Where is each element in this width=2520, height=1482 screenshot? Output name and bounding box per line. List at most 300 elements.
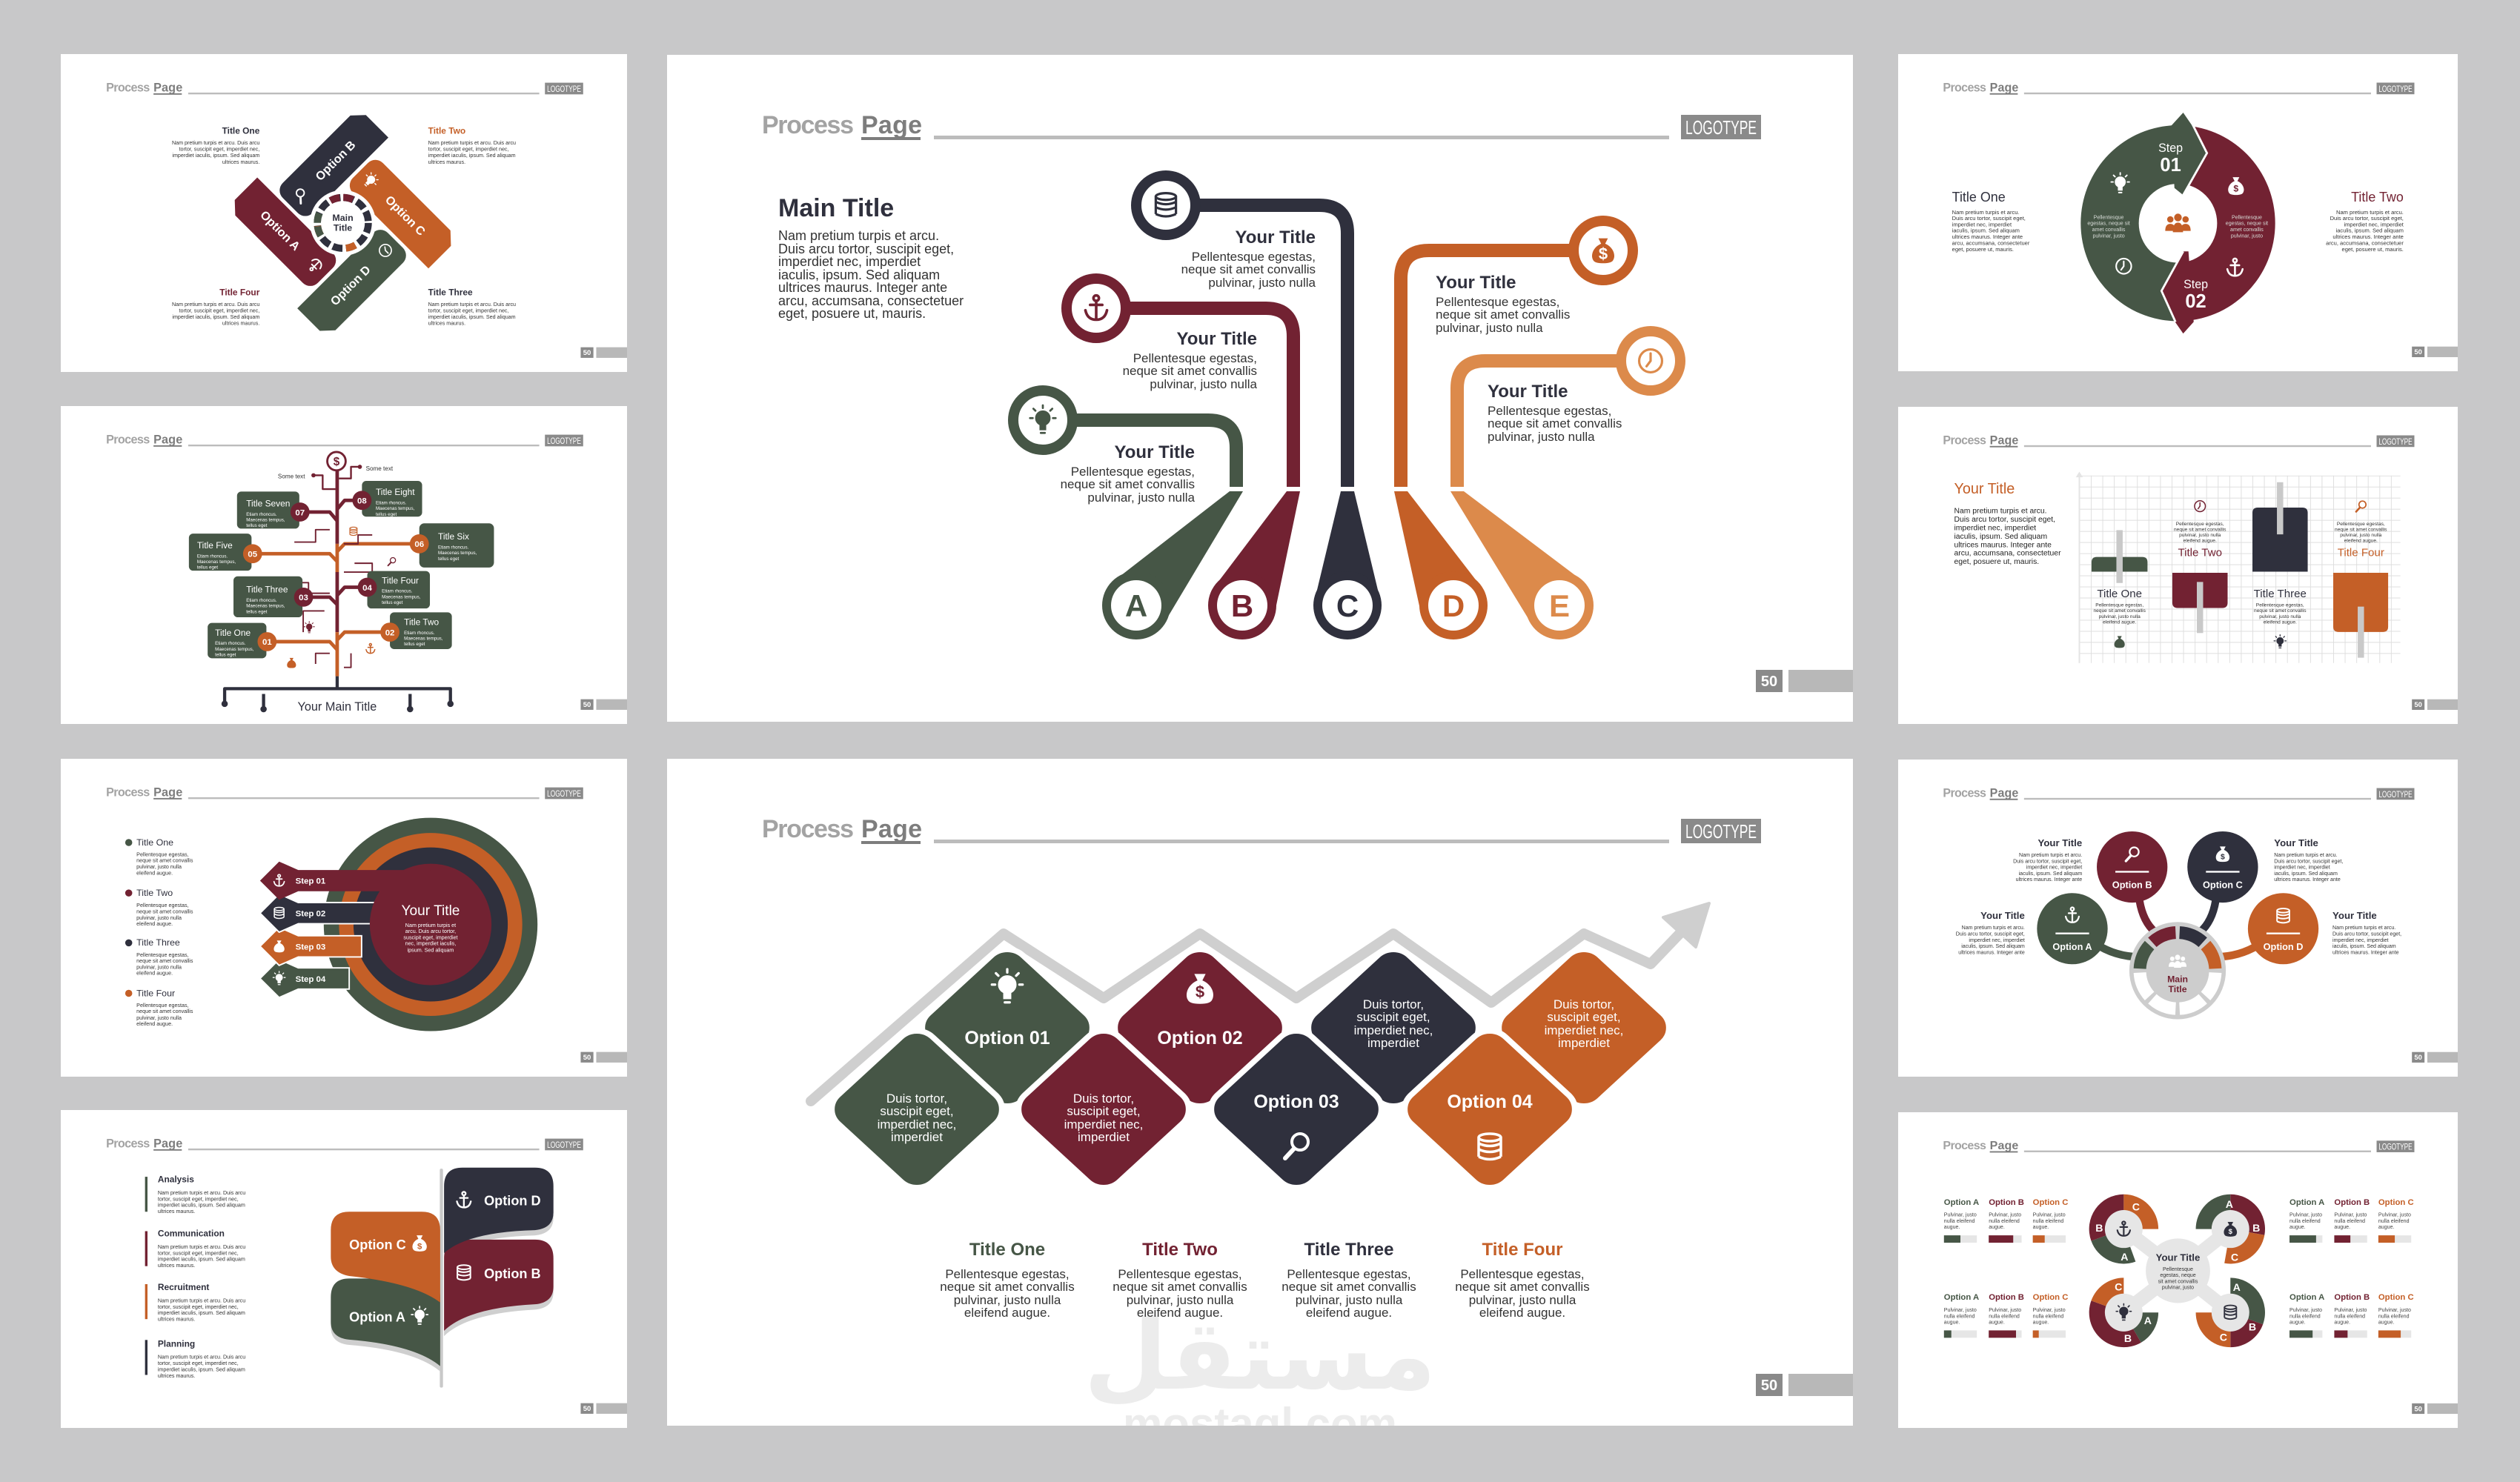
bottom titles bbox=[940, 1240, 1590, 1320]
box texts: tellus eget bbox=[382, 600, 403, 605]
page number bbox=[2412, 1403, 2458, 1414]
text: Title Three: ultrices maurus. bbox=[428, 321, 465, 327]
option tables right: nulla eleifend bbox=[2334, 1218, 2365, 1224]
number badges: 03 bbox=[299, 594, 308, 602]
donut BL bbox=[2089, 1277, 2158, 1347]
donut TR bbox=[2196, 1194, 2265, 1264]
ring texts and icons: Pellentesque bbox=[2232, 215, 2262, 221]
bottom titles: pulvinar, justo nulla bbox=[1127, 1293, 1234, 1307]
ring texts and icons: egestas, neque sit bbox=[2226, 221, 2268, 227]
bottom titles: Title Four bbox=[1482, 1240, 1562, 1260]
option tables left: nulla eleifend bbox=[1944, 1218, 1975, 1224]
diamond texts: imperdiet nec, bbox=[1545, 1023, 1623, 1037]
donut TR: B bbox=[2252, 1223, 2260, 1235]
donut TL: A bbox=[2121, 1252, 2128, 1263]
text: Title One: iaculis, ipsum. Sed aliquam bbox=[1952, 227, 2020, 234]
leaf labels: Option C bbox=[349, 1237, 406, 1252]
left list: Title Two bbox=[136, 888, 173, 898]
option tables right: augue. bbox=[2289, 1224, 2306, 1230]
step labels bbox=[273, 874, 326, 985]
option tables left: Option A bbox=[1944, 1293, 1979, 1302]
page number bbox=[580, 1052, 627, 1063]
header: Page bbox=[1990, 786, 2018, 800]
bubble labels: Option B bbox=[2112, 880, 2152, 891]
box texts: Title Eight bbox=[376, 487, 415, 497]
diamond texts: Option 03 bbox=[1253, 1091, 1339, 1112]
bottom titles: eleifend augue. bbox=[1306, 1306, 1392, 1320]
option tables left: nulla eleifend bbox=[1944, 1313, 1975, 1319]
page number: 50 bbox=[1761, 674, 1777, 690]
step labels: Step 04 bbox=[296, 975, 326, 984]
list: Analysis bbox=[158, 1174, 194, 1185]
text: Title One bbox=[1952, 190, 2030, 253]
box texts: Maecenas tempus, bbox=[246, 517, 285, 522]
center text: nec, imperdiet iaculis, bbox=[405, 941, 456, 947]
branch texts: Your Title bbox=[1177, 329, 1257, 349]
step labels: Step 03 bbox=[296, 943, 325, 951]
diamond texts: Duis tortor, bbox=[1554, 997, 1614, 1011]
header: LOGOTYPE bbox=[2378, 436, 2413, 447]
box texts: Title Seven bbox=[246, 498, 290, 508]
list: Nam pretium turpis et arcu. Duis arcu bbox=[158, 1355, 245, 1360]
bubble labels bbox=[2052, 846, 2303, 952]
option tables left: Option C bbox=[2033, 1198, 2068, 1207]
page number: 50 bbox=[583, 1054, 591, 1062]
option tables right: augue. bbox=[2334, 1319, 2350, 1325]
center text: suscipit eget, imperdiet bbox=[403, 935, 458, 941]
box texts: tellus eget bbox=[197, 565, 218, 571]
list: ultrices maurus. bbox=[158, 1373, 195, 1379]
slide: pinwheel options bbox=[61, 54, 627, 372]
column texts: eleifend augue. bbox=[2184, 539, 2217, 544]
option tables left: nulla eleifend bbox=[2033, 1313, 2063, 1319]
left list: Pellentesque egestas, bbox=[136, 852, 189, 858]
option tables left: Pulvinar, justo bbox=[1989, 1307, 2021, 1313]
box texts: Title Two bbox=[404, 617, 440, 628]
box texts: tellus eget bbox=[246, 523, 268, 528]
donut TR: A bbox=[2226, 1199, 2233, 1211]
donut TR: $ bbox=[2229, 1228, 2233, 1236]
icon: top dollar bbox=[328, 452, 345, 471]
text: Title Two: Nam pretium turpis et arcu. bbox=[2336, 209, 2404, 216]
box texts: Etiam rhoncus. bbox=[215, 641, 246, 646]
box texts: Maecenas tempus, bbox=[215, 647, 254, 652]
step labels: Step bbox=[2184, 278, 2208, 291]
number badges: 05 bbox=[248, 551, 258, 559]
list: Nam pretium turpis et arcu. Duis arcu bbox=[158, 1244, 245, 1250]
text: Title One: ultrices maurus. bbox=[222, 159, 259, 165]
list: tortor, suscipit eget, imperdiet nec, bbox=[158, 1250, 239, 1256]
column texts: neque sit amet convallis bbox=[2174, 527, 2226, 532]
header: Process bbox=[106, 1137, 150, 1151]
branch texts: Your Title bbox=[1488, 382, 1568, 402]
arm A bbox=[228, 178, 340, 290]
ring texts and icons: egestas, neque sit bbox=[2087, 221, 2130, 227]
step labels: 01 bbox=[2160, 155, 2181, 176]
page number bbox=[580, 1403, 627, 1414]
text: Title Four: Nam pretium turpis et arcu. Duis arcu bbox=[172, 302, 259, 308]
diamond texts: suscipit eget, bbox=[1547, 1010, 1621, 1024]
branch texts bbox=[1061, 227, 1622, 505]
bottom titles: eleifend augue. bbox=[964, 1306, 1050, 1320]
column texts: pulvinar, justo nulla bbox=[2340, 533, 2382, 538]
option tables left: Option B bbox=[1989, 1293, 2024, 1302]
page number bbox=[580, 700, 627, 710]
side texts: ultrices maurus. Integer ante bbox=[2274, 877, 2341, 883]
branch texts: Your Title bbox=[1436, 273, 1516, 293]
list: imperdiet iaculis, ipsum. Sed aliquam bbox=[158, 1257, 245, 1263]
donut TL bbox=[2089, 1194, 2158, 1263]
bottom titles: Pellentesque egestas, bbox=[1118, 1267, 1242, 1281]
side texts: Nam pretium turpis et arcu. bbox=[1962, 925, 2025, 931]
header: Page bbox=[1990, 1139, 2018, 1152]
option tables right: nulla eleifend bbox=[2378, 1313, 2410, 1319]
option tables left: augue. bbox=[2033, 1319, 2049, 1325]
arrow line bbox=[811, 903, 1709, 1101]
page number: 50 bbox=[583, 701, 591, 709]
left list: neque sit amet convallis bbox=[136, 858, 193, 864]
text: Title Four bbox=[172, 288, 260, 327]
left list: pulvinar, justo nulla bbox=[136, 915, 182, 921]
donut BR: B bbox=[2249, 1321, 2256, 1333]
option tables right: Pulvinar, justo bbox=[2378, 1307, 2411, 1313]
intro text bbox=[1954, 481, 2061, 566]
branch texts: neque sit amet convallis bbox=[1488, 416, 1622, 431]
header bbox=[762, 815, 1761, 844]
left list: neque sit amet convallis bbox=[136, 1009, 193, 1014]
column texts: Title Three bbox=[2254, 588, 2307, 600]
header bbox=[106, 1137, 583, 1151]
center text: Nam pretium turpis et bbox=[405, 923, 456, 928]
diamond texts: suscipit eget, bbox=[1356, 1010, 1430, 1024]
box texts: Etiam rhoncus. bbox=[382, 589, 413, 594]
icons: $ bbox=[1599, 245, 1608, 263]
left list bbox=[125, 837, 193, 1027]
main title text: Main Title bbox=[778, 194, 894, 222]
column texts: Pellentesque egestas, bbox=[2095, 603, 2143, 608]
branch texts: neque sit amet convallis bbox=[1123, 364, 1257, 378]
column texts: neque sit amet convallis bbox=[2335, 527, 2387, 532]
option tables left: augue. bbox=[2033, 1224, 2049, 1230]
option tables left bbox=[1944, 1198, 2068, 1338]
text: Title One: arcu, accumsana, consectetuer bbox=[1952, 239, 2030, 246]
header: Process bbox=[762, 111, 854, 139]
page number: 50 bbox=[1761, 1378, 1777, 1394]
header: Page bbox=[153, 786, 182, 800]
option tables right: Option B bbox=[2334, 1198, 2370, 1207]
text: Title One: Title One bbox=[222, 126, 260, 136]
side texts bbox=[1956, 837, 2401, 956]
column texts: pulvinar, justo nulla bbox=[2099, 614, 2141, 619]
text: Title Two: imperdiet iaculis, ipsum. Sed aliquam bbox=[428, 153, 516, 159]
ring texts and icons: pulvinar, justo bbox=[2231, 233, 2263, 239]
side texts: imperdiet nec, imperdiet bbox=[2274, 864, 2330, 870]
letter drops: A bbox=[1125, 588, 1147, 623]
donut TL: C bbox=[2132, 1202, 2140, 1214]
list: ultrices maurus. bbox=[158, 1263, 195, 1269]
header: LOGOTYPE bbox=[1685, 116, 1757, 139]
text: Title Two: imperdiet nec, imperdiet bbox=[2344, 222, 2404, 228]
column texts: Title Four bbox=[2338, 547, 2384, 559]
intro text: Nam pretium turpis et arcu. bbox=[1954, 508, 2047, 516]
slide: leaf options bbox=[61, 1110, 627, 1428]
header: LOGOTYPE bbox=[2378, 84, 2413, 94]
box texts: tellus eget bbox=[215, 652, 236, 657]
arm C: Option C bbox=[382, 193, 428, 239]
leaf labels: Option A bbox=[349, 1310, 405, 1325]
center circle: pulvinar, justo bbox=[2162, 1285, 2194, 1291]
box texts: Title Three bbox=[246, 585, 288, 595]
main wheel bbox=[2129, 922, 2226, 1019]
text: Title Two: arcu, accumsana, consectetuer bbox=[2326, 239, 2404, 246]
text: Title One: Nam pretium turpis et arcu. bbox=[1952, 209, 2020, 216]
bubble labels: Option C bbox=[2203, 880, 2243, 891]
text: Title Two: Title Two bbox=[2351, 190, 2404, 205]
page number bbox=[1756, 670, 1853, 692]
center circle bbox=[2146, 1238, 2210, 1303]
option tables right: augue. bbox=[2378, 1224, 2395, 1230]
header: LOGOTYPE bbox=[547, 1140, 581, 1150]
option tables left: Pulvinar, justo bbox=[2033, 1212, 2066, 1218]
column texts: Pellentesque egestas, bbox=[2337, 522, 2385, 527]
column texts: Pellentesque egestas, bbox=[2176, 522, 2224, 527]
text: Title One: eget, posuere ut, mauris. bbox=[1952, 246, 2014, 253]
diamond texts: suscipit eget, bbox=[1067, 1104, 1141, 1118]
icons bbox=[1030, 193, 1662, 433]
center hub bbox=[310, 190, 376, 256]
left list: eleifend augue. bbox=[136, 1021, 173, 1027]
option tables right: augue. bbox=[2289, 1319, 2306, 1325]
bottom titles: neque sit amet convallis bbox=[1281, 1280, 1416, 1294]
header: LOGOTYPE bbox=[1685, 820, 1757, 843]
text: Title Two bbox=[428, 126, 516, 165]
center text: arcu. Duis arcu tortor, bbox=[405, 928, 456, 934]
connectors bbox=[2123, 1229, 2230, 1312]
side texts: ultrices maurus. Integer ante bbox=[2016, 877, 2082, 883]
side texts: imperdiet nec, imperdiet bbox=[2332, 937, 2389, 943]
bottom titles: Title Three bbox=[1304, 1240, 1393, 1260]
left list: eleifend augue. bbox=[136, 870, 173, 876]
bottom titles: neque sit amet convallis bbox=[1455, 1280, 1590, 1294]
number badges: 01 bbox=[262, 638, 272, 647]
slide: branches A-E (large) bbox=[667, 55, 1853, 722]
some text labels bbox=[278, 465, 394, 480]
side texts: Your Title bbox=[1980, 910, 2025, 921]
arm A: Option A bbox=[257, 208, 302, 253]
donut TR: C bbox=[2231, 1252, 2238, 1264]
side texts: Duis arcu tortor, suscipit eget, bbox=[2274, 858, 2343, 864]
header: Page bbox=[861, 815, 922, 843]
box texts: Etiam rhoncus. bbox=[404, 631, 435, 636]
list: tortor, suscipit eget, imperdiet nec, bbox=[158, 1360, 239, 1366]
option tables right: nulla eleifend bbox=[2334, 1313, 2365, 1319]
column texts: eleifend augue. bbox=[2103, 619, 2136, 625]
header: Process bbox=[106, 433, 150, 447]
column texts bbox=[2093, 501, 2387, 648]
number badges: 04 bbox=[362, 584, 373, 593]
option tables right bbox=[2289, 1198, 2414, 1338]
text: Title Four: tortor, suscipit eget, imperdiet nec, bbox=[179, 308, 259, 313]
header: Process bbox=[1943, 433, 1986, 447]
list: tortor, suscipit eget, imperdiet nec, bbox=[158, 1197, 239, 1203]
main wheel: Main bbox=[2167, 974, 2188, 985]
bottom titles: pulvinar, justo nulla bbox=[1469, 1293, 1576, 1307]
ring texts and icons: $ bbox=[2233, 183, 2238, 193]
letter drops bbox=[1102, 491, 1594, 639]
box texts: Title Four bbox=[382, 575, 419, 585]
center text bbox=[402, 903, 460, 953]
slide: grid bars bbox=[1898, 407, 2458, 724]
column texts: pulvinar, justo nulla bbox=[2179, 533, 2221, 538]
center circle: sit amet convallis bbox=[2158, 1279, 2198, 1285]
branch texts: Your Title bbox=[1115, 442, 1195, 462]
cycle ring bbox=[2080, 113, 2275, 333]
text: Title One: Title One bbox=[1952, 190, 2006, 205]
main title text: Nam pretium turpis et arcu. bbox=[778, 228, 939, 243]
header: LOGOTYPE bbox=[547, 84, 581, 94]
branch texts: Pellentesque egestas, bbox=[1133, 351, 1257, 365]
main title text: iaculis, ipsum. Sed aliquam bbox=[778, 268, 940, 282]
text: Title One: Nam pretium turpis et arcu. Duis arcu bbox=[172, 140, 259, 146]
header: Process bbox=[1943, 786, 1986, 800]
text: Title Two: iaculis, ipsum. Sed aliquam bbox=[2336, 227, 2404, 234]
option tables right: Pulvinar, justo bbox=[2289, 1307, 2322, 1313]
header bbox=[106, 786, 583, 800]
text: Title Three: Title Three bbox=[428, 288, 473, 298]
header: Process bbox=[106, 82, 150, 95]
some text labels: Some text bbox=[278, 473, 305, 480]
header: LOGOTYPE bbox=[547, 788, 581, 799]
root dots bbox=[222, 701, 454, 712]
bottom titles: pulvinar, justo nulla bbox=[954, 1293, 1061, 1307]
leaves bbox=[331, 1168, 554, 1388]
diamond texts: suscipit eget, bbox=[880, 1104, 954, 1118]
boxes bbox=[189, 481, 494, 658]
box texts: Title Six bbox=[438, 531, 469, 542]
branch texts: Pellentesque egestas, bbox=[1071, 465, 1195, 479]
side texts: iaculis, ipsum. Sed aliquam bbox=[1961, 943, 2025, 949]
text: Title Four: Title Four bbox=[219, 288, 260, 298]
option tables left: augue. bbox=[1989, 1224, 2005, 1230]
box texts: Maecenas tempus, bbox=[438, 551, 477, 556]
option tables right: Option C bbox=[2378, 1198, 2414, 1207]
main title: Your Main Title bbox=[298, 700, 377, 714]
option tables right: Pulvinar, justo bbox=[2334, 1307, 2367, 1313]
header bbox=[1943, 81, 2414, 95]
intro text: eget, posuere ut, mauris. bbox=[1954, 558, 2039, 566]
step labels: Step 02 bbox=[296, 910, 325, 919]
diamond texts: Option 04 bbox=[1447, 1091, 1533, 1112]
tree trunk and branches bbox=[225, 467, 451, 708]
donut BL: B bbox=[2124, 1333, 2132, 1345]
page number bbox=[1756, 1374, 1853, 1396]
side texts: Your Title bbox=[2332, 910, 2377, 921]
box texts: Maecenas tempus, bbox=[382, 594, 421, 599]
center circle: Pellentesque bbox=[2163, 1266, 2193, 1272]
diamond texts: Duis tortor, bbox=[886, 1091, 947, 1106]
option tables right: augue. bbox=[2378, 1319, 2395, 1325]
page number bbox=[2412, 700, 2458, 710]
header: Process bbox=[1943, 1139, 1986, 1152]
side texts: ultrices maurus. Integer ante bbox=[2332, 949, 2399, 956]
left list: pulvinar, justo nulla bbox=[136, 864, 182, 870]
main title text: ultrices maurus. Integer ante bbox=[778, 280, 947, 295]
bubble labels: $ bbox=[2221, 854, 2225, 862]
text: Title Three: imperdiet iaculis, ipsum. Sed aliquam bbox=[428, 314, 516, 320]
side texts: Your Title bbox=[2274, 837, 2318, 848]
list: Recruitment bbox=[158, 1282, 209, 1292]
option tables right: Option A bbox=[2289, 1198, 2324, 1207]
diamond texts bbox=[878, 969, 1623, 1159]
header bbox=[1943, 786, 2414, 800]
arm B bbox=[275, 107, 388, 220]
side texts: Duis arcu tortor, suscipit eget, bbox=[2013, 858, 2082, 864]
list: imperdiet iaculis, ipsum. Sed aliquam bbox=[158, 1310, 245, 1316]
header: Page bbox=[1990, 433, 2018, 447]
bottom titles: neque sit amet convallis bbox=[940, 1280, 1075, 1294]
box texts: Etiam rhoncus. bbox=[246, 598, 277, 603]
diamond texts: Option 02 bbox=[1157, 1028, 1243, 1049]
step labels: Step bbox=[2158, 142, 2183, 155]
list: ultrices maurus. bbox=[158, 1317, 195, 1323]
column texts: pulvinar, justo nulla bbox=[2259, 614, 2301, 619]
diamond texts: Duis tortor, bbox=[1073, 1091, 1134, 1106]
box texts: Title One bbox=[215, 628, 251, 638]
bubbles bbox=[2037, 831, 2318, 964]
option tables left: augue. bbox=[1989, 1319, 2005, 1325]
column texts: neque sit amet convallis bbox=[2254, 608, 2307, 614]
page number: 50 bbox=[583, 349, 591, 357]
text: Title Three: tortor, suscipit eget, imperdiet nec, bbox=[428, 308, 509, 313]
diamond texts: Duis tortor, bbox=[1363, 997, 1424, 1011]
donut TL: B bbox=[2095, 1223, 2103, 1235]
option tables left: nulla eleifend bbox=[1989, 1313, 2020, 1319]
left list: eleifend augue. bbox=[136, 921, 173, 927]
side texts: imperdiet nec, imperdiet bbox=[1969, 937, 2025, 943]
box texts: tellus eget bbox=[246, 609, 268, 614]
ring texts and icons: amet convallis bbox=[2092, 227, 2126, 233]
slide: tree bbox=[61, 406, 627, 724]
option tables left: augue. bbox=[1944, 1224, 1960, 1230]
center hub: Title bbox=[334, 222, 352, 233]
left list: eleifend augue. bbox=[136, 971, 173, 977]
side texts: iaculis, ipsum. Sed aliquam bbox=[2274, 871, 2338, 877]
header bbox=[106, 82, 583, 95]
text: Title One: tortor, suscipit eget, imperdiet nec, bbox=[179, 147, 259, 153]
bottom titles: Pellentesque egestas, bbox=[945, 1267, 1070, 1281]
header: LOGOTYPE bbox=[2378, 789, 2413, 800]
small icons bbox=[287, 527, 396, 668]
header bbox=[106, 433, 583, 447]
text: Title Two: tortor, suscipit eget, imperdiet nec, bbox=[428, 147, 509, 153]
branch lines bbox=[1070, 205, 1623, 487]
bottom titles: eleifend augue. bbox=[1137, 1306, 1223, 1320]
box texts: Title Five bbox=[197, 540, 233, 551]
icon circles bbox=[1013, 176, 1680, 450]
left list: Title Three bbox=[136, 937, 180, 948]
box texts: tellus eget bbox=[438, 556, 460, 562]
option tables left: nulla eleifend bbox=[2033, 1218, 2063, 1224]
text: Title Three: Nam pretium turpis et arcu. Duis arcu bbox=[428, 302, 516, 308]
donut BR bbox=[2196, 1277, 2265, 1347]
box texts: tellus eget bbox=[404, 642, 425, 647]
option tables left: Pulvinar, justo bbox=[1944, 1307, 1977, 1313]
list: ultrices maurus. bbox=[158, 1209, 195, 1214]
branch texts: Pellentesque egestas, bbox=[1488, 404, 1611, 418]
arm B: Option B bbox=[313, 139, 359, 184]
main title text: Duis arcu tortor, suscipit eget, bbox=[778, 242, 954, 256]
number badges: 02 bbox=[385, 628, 394, 637]
